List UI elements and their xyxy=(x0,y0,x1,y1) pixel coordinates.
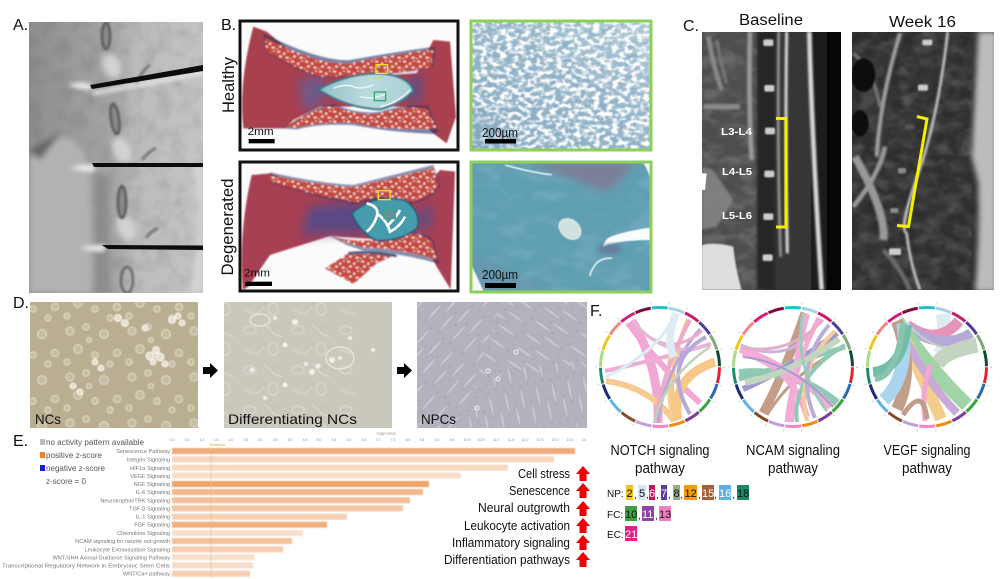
pathway labels: Leukocyte Extravasation Signaling xyxy=(84,547,170,553)
cluster legend: 2 xyxy=(626,488,633,500)
panel F: chord diagrams xyxy=(576,283,1000,541)
pathway labels: FGF Signaling xyxy=(134,523,170,529)
axis: 9.0 xyxy=(435,438,439,442)
pathway name NOTCH: pathway xyxy=(635,461,686,477)
bars xyxy=(172,448,575,577)
chord NOTCH xyxy=(576,283,744,451)
axis: 8.0 xyxy=(406,438,410,442)
z-score legend xyxy=(40,438,144,486)
z-score legend: positive z-score xyxy=(46,451,102,460)
panel D: cell culture xyxy=(13,295,587,428)
degenerated whole disc section xyxy=(240,162,458,291)
axis: 0.0 xyxy=(170,438,174,442)
cluster legend: 13 xyxy=(659,509,671,521)
cluster legend: 5 xyxy=(639,488,645,500)
chord NCAM xyxy=(709,283,877,451)
disc level labels: L5-L6 xyxy=(722,210,752,222)
MRI baseline xyxy=(702,32,841,290)
threshold line xyxy=(210,447,212,578)
label differentiating NCs: Differentiating NCs xyxy=(228,411,357,427)
axis: Threshold xyxy=(209,443,225,447)
callouts with red arrows xyxy=(444,466,590,567)
axis: 11.0 xyxy=(493,438,499,442)
cluster legend: , xyxy=(714,490,717,501)
axis: 10.5 xyxy=(478,438,484,442)
axis: 12.5 xyxy=(537,438,543,442)
pathway labels: Transcriptional Regulatory Network in Embryonic Stem Cells xyxy=(2,563,170,569)
label D: D. xyxy=(13,295,29,312)
pathway labels: VEGF Signaling xyxy=(130,474,170,480)
axis: 6.5 xyxy=(362,438,366,442)
axis: 4.5 xyxy=(303,438,307,442)
axis: 13.5 xyxy=(567,438,573,442)
callouts with red arrows: Senescence xyxy=(509,483,570,498)
label NPCs: NPCs xyxy=(421,411,456,427)
pathway name NOTCH xyxy=(610,443,710,477)
axis: 1.0 xyxy=(200,438,204,442)
axis: 1.5 xyxy=(214,438,218,442)
pathway labels: NGF Signaling xyxy=(134,482,170,488)
fluoroscopy image xyxy=(29,22,203,293)
axis: 3.0 xyxy=(258,438,262,442)
z-score legend: no activity pattern available xyxy=(46,438,144,447)
cluster legend: 18 xyxy=(737,488,749,500)
axis: 9.5 xyxy=(450,438,454,442)
axis: 8.5 xyxy=(420,438,424,442)
disc level labels xyxy=(721,126,752,222)
panel C: MRI xyxy=(683,12,997,292)
pathway labels: HIF1α Signaling xyxy=(130,466,170,472)
axis: 12.0 xyxy=(522,438,528,442)
pathway labels: IL-6 Signaling xyxy=(136,490,170,496)
pathway labels: Neurotrophin/TRK Signaling xyxy=(100,498,170,504)
cluster legend: 15 xyxy=(702,488,714,500)
callouts with red arrows: Leukocyte activation xyxy=(464,518,570,533)
cluster legend: , xyxy=(655,511,658,522)
cluster legend: 12 xyxy=(684,488,697,500)
axis: 7.5 xyxy=(391,438,395,442)
pathway labels: WNT/SHH Axonal Guidance Signaling Pathway xyxy=(52,555,170,561)
axis: 7.0 xyxy=(376,438,380,442)
cluster legend: 6 xyxy=(649,488,655,500)
axis: 2.0 xyxy=(229,438,233,442)
cluster legend: , xyxy=(680,490,683,501)
micrograph NCs xyxy=(30,302,198,428)
axis: 6.0 xyxy=(347,438,351,442)
cluster legend: 8 xyxy=(674,488,680,500)
yellow bracket baseline xyxy=(776,118,786,227)
axis: 3.5 xyxy=(273,438,277,442)
cluster legend: 16 xyxy=(719,488,731,500)
chord VEGF xyxy=(843,283,1000,451)
pathway labels xyxy=(2,449,170,578)
cluster legend: , xyxy=(668,490,671,501)
panel A: fluoroscopy with needles xyxy=(13,17,203,293)
degenerated nucleus magnified xyxy=(470,161,653,292)
arrow D1 xyxy=(203,363,218,378)
axis: 5.0 xyxy=(317,438,321,442)
disc level labels: L3-L4 xyxy=(721,126,752,138)
axis: 0.5 xyxy=(185,438,189,442)
pathway labels: Integrin Signaling xyxy=(127,458,170,464)
healthy whole disc section xyxy=(240,21,458,150)
axis: 4.0 xyxy=(288,438,292,442)
label B: B. xyxy=(221,17,236,34)
pathway name NCAM: NCAM signaling xyxy=(746,443,840,459)
cluster legend: 10 xyxy=(625,509,637,521)
cluster legend: , xyxy=(634,490,637,501)
axis: 5.5 xyxy=(332,438,336,442)
pathway name NCAM: pathway xyxy=(768,461,819,477)
pathway name NCAM xyxy=(746,443,840,477)
cluster legend: , xyxy=(646,490,649,501)
cluster legend: , xyxy=(698,490,701,501)
pathway name VEGF: VEGF signaling xyxy=(884,443,970,459)
label A: A. xyxy=(13,17,28,34)
callouts with red arrows: Differentiation pathways xyxy=(444,552,570,567)
cluster legend: NP: xyxy=(607,489,624,500)
label E: E. xyxy=(13,433,28,450)
cluster legend: , xyxy=(732,490,735,501)
axis: -log(p-value) xyxy=(376,432,396,436)
panel E: pathway bar chart xyxy=(2,432,590,578)
callouts with red arrows: Neural outgrowth xyxy=(478,500,570,515)
healthy nucleus magnified xyxy=(470,20,651,151)
pathway name VEGF xyxy=(884,443,970,477)
axis: 10.0 xyxy=(464,438,470,442)
pathway labels: TGF-β Signaling xyxy=(129,506,170,512)
heading baseline: Baseline xyxy=(739,12,803,29)
callouts with red arrows: Inflammatory signaling xyxy=(452,535,570,550)
cluster legend: 7 xyxy=(661,488,667,500)
healthy whole disc section: 2mm xyxy=(248,126,274,138)
arrow D2 xyxy=(397,363,412,378)
pathway labels: WNT/Ca+ pathway xyxy=(123,572,170,578)
pathway labels: Senescence Pathway xyxy=(116,449,170,455)
panel B: histology xyxy=(218,17,653,292)
yellow bracket week 16 xyxy=(897,116,927,226)
cluster legend: EC: xyxy=(607,530,624,541)
heading week 16: Week 16 xyxy=(889,14,956,31)
micrograph NPCs xyxy=(417,302,587,428)
cluster legend xyxy=(607,485,749,541)
z-score legend: z-score = 0 xyxy=(46,477,87,486)
axis xyxy=(170,432,586,447)
axis: 2.5 xyxy=(244,438,248,442)
pathway name NOTCH: NOTCH signaling xyxy=(610,443,710,459)
MRI week 16 xyxy=(851,32,997,292)
micrograph differentiating NCs xyxy=(224,302,392,428)
label NCs: NCs xyxy=(35,411,61,427)
label C: C. xyxy=(683,18,699,35)
pathway name VEGF: pathway xyxy=(902,461,953,477)
pathway labels: Chemokine Signaling xyxy=(117,531,170,537)
axis: 11.5 xyxy=(508,438,514,442)
row label healthy: Healthy xyxy=(219,57,238,113)
disc level labels: L4-L5 xyxy=(722,166,752,178)
cluster legend: FC: xyxy=(607,510,623,521)
axis: 13.0 xyxy=(552,438,558,442)
degenerated nucleus magnified: 200µm xyxy=(482,268,518,282)
z-score legend: negative z-score xyxy=(46,464,105,473)
degenerated whole disc section: 2mm xyxy=(244,268,270,280)
cluster legend: 11 xyxy=(642,509,653,521)
row label degenerated: Degenerated xyxy=(218,178,237,276)
pathway labels: IL-1 Signaling xyxy=(136,515,170,521)
healthy nucleus magnified: 200µm xyxy=(482,126,518,140)
label F: F. xyxy=(590,303,602,320)
callouts with red arrows: Cell stress xyxy=(518,466,570,481)
cluster legend: , xyxy=(638,511,641,522)
pathway labels: NCAM signaling for neurite out-growth xyxy=(75,539,170,545)
cluster legend: 21 xyxy=(625,529,637,541)
axis: 14 xyxy=(582,438,586,442)
cluster legend: , xyxy=(656,490,659,501)
